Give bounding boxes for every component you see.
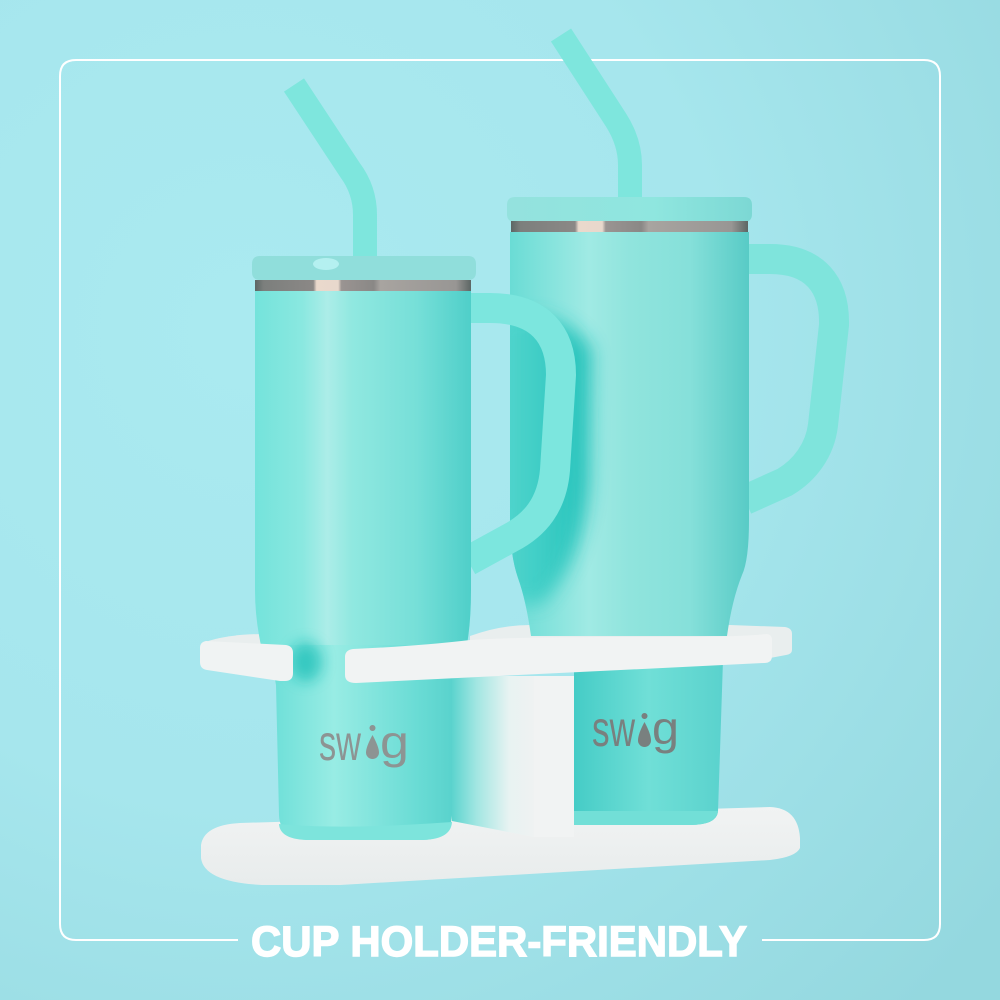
- right mug foot rim: [574, 811, 718, 825]
- pillar side face: [452, 676, 534, 837]
- holder front bar: [345, 634, 772, 683]
- left straw: [294, 85, 365, 256]
- right mug: [495, 35, 834, 636]
- holder top surface back: [470, 625, 792, 668]
- shadow of left handle on right mug: [495, 315, 592, 605]
- holder left tab back rim: [203, 634, 266, 650]
- holder base: [201, 807, 800, 885]
- right straw: [561, 35, 630, 197]
- left mug foot rim: [279, 822, 452, 840]
- left logo: sw: [319, 715, 362, 771]
- right mug lid: [507, 197, 752, 222]
- left logo: g: [380, 716, 409, 768]
- shadow under left tab: [290, 642, 322, 682]
- left mug steel band: [255, 280, 471, 291]
- left logo: [319, 715, 409, 771]
- left mug: [252, 85, 561, 840]
- pillar front face: [534, 676, 574, 837]
- left mug lower section: [262, 645, 468, 840]
- title: CUP HOLDER-FRIENDLY: [251, 918, 747, 966]
- holder left tab: [200, 641, 293, 681]
- right mug body: [510, 232, 749, 636]
- right logo: g: [652, 702, 679, 754]
- left mug body: [255, 291, 471, 650]
- right logo: sw: [592, 701, 636, 757]
- right mug lower section: [574, 660, 723, 825]
- right mug handle: [745, 259, 834, 500]
- right mug steel band: [511, 221, 748, 232]
- left lid highlight: [313, 258, 339, 270]
- holder pillar: [452, 676, 574, 837]
- white rounded frame: [60, 60, 940, 940]
- left mug handle: [468, 308, 561, 561]
- left mug lid: [252, 256, 476, 280]
